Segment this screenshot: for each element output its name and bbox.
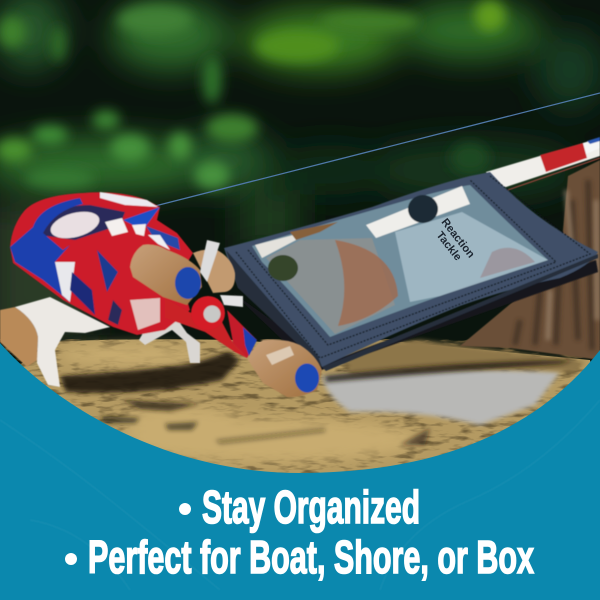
photo: tree stump at right <box>460 160 600 360</box>
reel: blue side plate and frame <box>10 198 83 302</box>
bullet: stay organized: Stay Organized <box>202 481 420 533</box>
wallet: dark blue vinyl border <box>224 172 598 367</box>
log: cast shadows <box>60 352 574 445</box>
wallet: stitching <box>248 180 556 345</box>
rod blank with flag wrap <box>486 137 600 192</box>
log: pale weathered wood <box>322 370 560 425</box>
log: brown ridge under the wallet <box>345 340 585 374</box>
reel: handle arm <box>165 298 247 358</box>
reel: trigger <box>139 303 200 363</box>
wallet: brand text: Tackle <box>434 229 464 263</box>
photo: fallen log surface <box>0 339 600 500</box>
teal curved text band <box>0 343 600 600</box>
reel: lower cork knob <box>248 340 322 397</box>
wallet: back flap shadow <box>232 260 598 372</box>
reel: handle spokes <box>200 240 220 282</box>
bullet list text <box>65 481 534 583</box>
reel: centre knob <box>191 296 225 330</box>
reel: front cork behind the wallet <box>193 249 235 293</box>
reel: rear cork handle <box>0 307 38 367</box>
log: sunlit yellow patches <box>60 345 420 462</box>
reel: flag camo details <box>97 250 118 292</box>
tackle wallet product <box>224 172 598 372</box>
fishing line <box>155 93 600 206</box>
baitcast reel <box>0 192 322 397</box>
reel: white seat and foot <box>15 297 110 387</box>
reel: upper cork knob <box>130 245 202 305</box>
reel: spool cavity <box>40 205 125 240</box>
wallet: bottom dark edge <box>226 250 598 371</box>
band: subtle topographic texture <box>0 400 600 590</box>
bullet: stay organized <box>179 481 420 533</box>
wallet: brand text: Reaction <box>439 216 477 261</box>
reel: red and blue patterned body <box>10 192 193 335</box>
wallet: clear window <box>252 185 548 337</box>
wallet: window reflection and lure colours <box>255 186 548 334</box>
